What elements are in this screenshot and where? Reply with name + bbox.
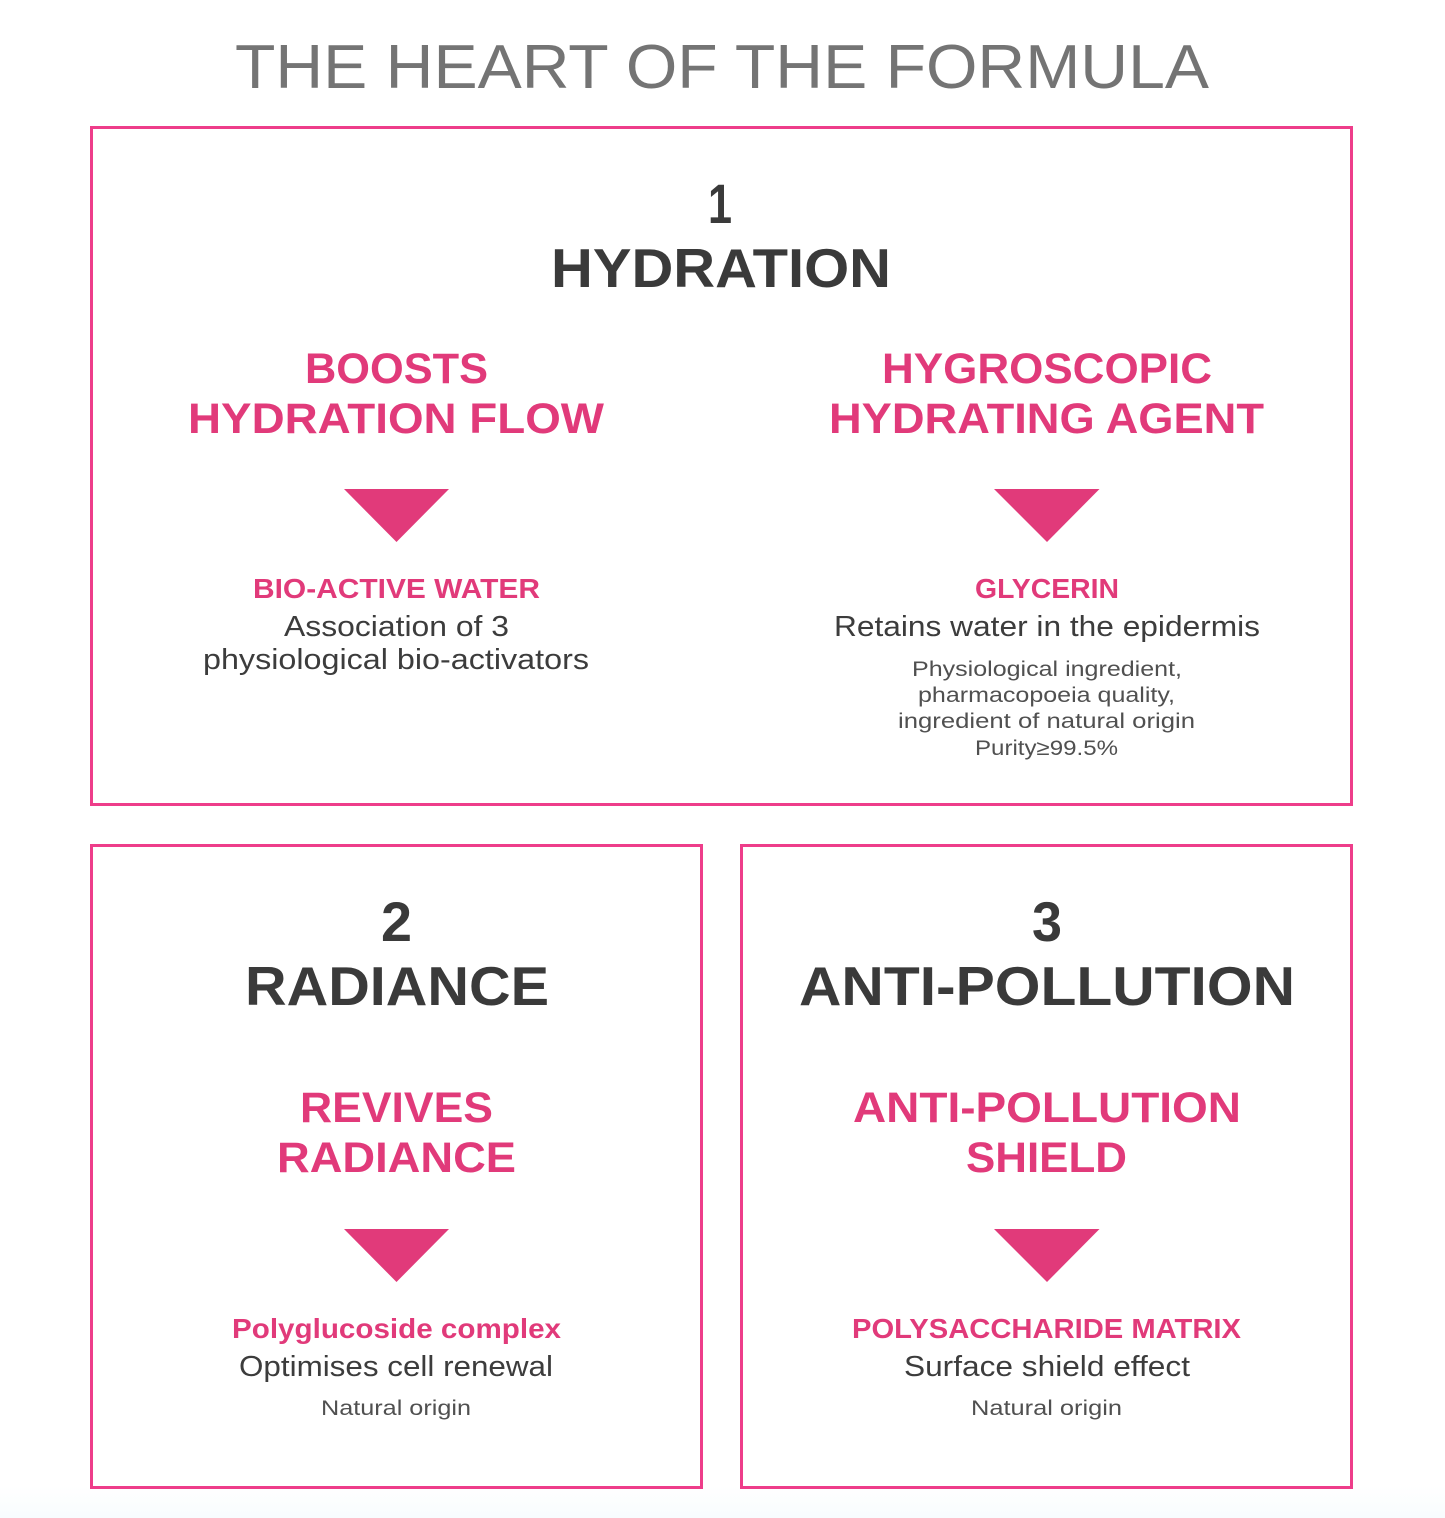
ingredient: polysaccharide matrix: Natural origin	[971, 1396, 1122, 1420]
ingredient: polyglucoside complex: Natural origin	[321, 1396, 471, 1420]
panel heading: anti-pollution: ANTI-POLLUTION	[799, 955, 1295, 1017]
ingredient: glycerin: GLYCERIN	[975, 573, 1119, 604]
title: THE HEART OF THE FORMULA	[235, 33, 1210, 102]
panel: hydration	[92, 128, 1352, 804]
subheading: boosts hydration flow: BOOSTS	[305, 345, 488, 393]
panel: anti-pollution	[742, 846, 1352, 1488]
subheading: boosts hydration flow	[188, 345, 604, 443]
ingredient: polysaccharide matrix: Surface shield effect	[904, 1351, 1190, 1383]
icon: down arrow right	[994, 489, 1100, 542]
subheading: hygroscopic hydrating agent: HYDRATING AGENT	[829, 395, 1264, 443]
ingredient: polysaccharide matrix	[852, 1313, 1241, 1420]
subheading: hygroscopic hydrating agent: HYGROSCOPIC	[882, 345, 1212, 393]
icon: down arrow left	[344, 489, 449, 542]
panel: radiance	[92, 846, 702, 1488]
subheading: hygroscopic hydrating agent	[829, 345, 1264, 443]
subheading: anti-pollution shield: ANTI-POLLUTION	[853, 1084, 1241, 1132]
ingredient: polyglucoside complex: Polyglucoside complex	[232, 1313, 561, 1344]
ingredient: polyglucoside complex	[232, 1313, 561, 1420]
ingredient: bio-active water: Association of 3	[284, 611, 509, 643]
ingredient: polyglucoside complex: Optimises cell renewal	[239, 1351, 553, 1383]
panel heading: radiance: RADIANCE	[245, 955, 549, 1017]
panel heading: hydration: HYDRATION	[551, 237, 891, 299]
icon: down arrow	[344, 1229, 449, 1282]
ingredient: glycerin: Retains water in the epidermis	[834, 611, 1260, 643]
panel number: 3: 3	[1032, 890, 1062, 953]
icon: down arrow	[994, 1229, 1100, 1282]
ingredient: bio-active water: physiological bio-activators	[203, 644, 589, 676]
subheading: revives radiance: RADIANCE	[277, 1134, 516, 1182]
panel number: 1: 1	[708, 172, 732, 235]
subheading: revives radiance	[277, 1084, 516, 1182]
subheading: boosts hydration flow: HYDRATION FLOW	[188, 395, 604, 443]
ingredient: glycerin: Physiological ingredient,	[912, 657, 1182, 681]
ingredient: bio-active water	[203, 573, 589, 676]
panel number: 2: 2	[381, 890, 412, 953]
ingredient: glycerin	[834, 573, 1260, 760]
ingredient: glycerin: Purity≥99.5%	[975, 736, 1118, 760]
subheading: anti-pollution shield: SHIELD	[966, 1134, 1127, 1182]
ingredient: glycerin: ingredient of natural origin	[898, 709, 1195, 733]
ingredient: bio-active water: BIO-ACTIVE WATER	[253, 573, 540, 604]
subheading: anti-pollution shield	[853, 1084, 1241, 1182]
ingredient: glycerin: pharmacopoeia quality,	[918, 683, 1175, 707]
subheading: revives radiance: REVIVES	[300, 1084, 493, 1132]
ingredient: polysaccharide matrix: POLYSACCHARIDE MATRIX	[852, 1313, 1241, 1344]
